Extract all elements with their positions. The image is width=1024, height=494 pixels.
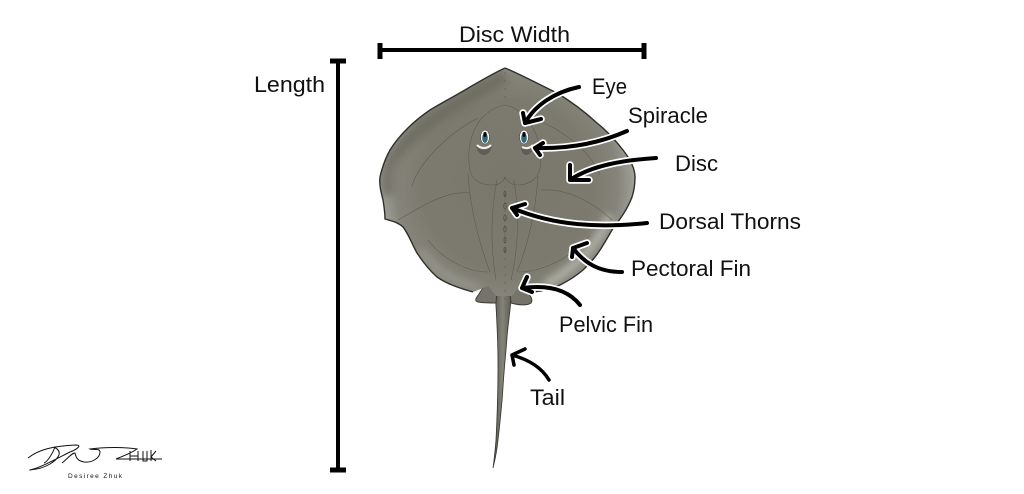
- arrow: dorsal thorns: [512, 204, 647, 225]
- label: disc: Disc: [675, 151, 718, 176]
- arrow: eye: [523, 87, 579, 123]
- body markings: [398, 72, 612, 300]
- arrow: pectoral fin: [572, 243, 622, 272]
- label: pectoral fin: Pectoral Fin: [631, 256, 751, 281]
- label: tail: Tail: [530, 385, 565, 410]
- arrow: disc: [570, 158, 656, 180]
- left eye and spiracle: [476, 130, 492, 155]
- disc outline: [380, 68, 635, 296]
- label: spiracle: Spiracle: [628, 103, 708, 128]
- label: dorsal thorns: Dorsal Thorns: [659, 209, 801, 234]
- disc edge line: [380, 68, 635, 292]
- disc width scale bar: [380, 43, 644, 59]
- length scale bar: [330, 61, 346, 470]
- signature name: Desiree Zhuk: [68, 473, 123, 480]
- tail: [493, 290, 512, 468]
- signature: [28, 445, 162, 480]
- label: eye: Eye: [592, 74, 627, 99]
- signature scrawl: [28, 445, 162, 470]
- dorsal thorns: [504, 191, 506, 252]
- stingray illustration: [380, 68, 635, 468]
- right eye and spiracle: [520, 130, 534, 155]
- infographic: stingray anatomy diagram: [28, 26, 800, 478]
- arrow: spiracle: [535, 131, 627, 155]
- disc edge shading: [386, 76, 610, 288]
- heading: length: Length: [254, 72, 325, 97]
- heading: disc width: Disc Width: [459, 22, 570, 47]
- label: pelvic fin: Pelvic Fin: [559, 312, 653, 337]
- arrow: pelvic fin: [522, 277, 580, 305]
- arrow: tail: [512, 349, 549, 380]
- pelvic fins: [476, 272, 532, 305]
